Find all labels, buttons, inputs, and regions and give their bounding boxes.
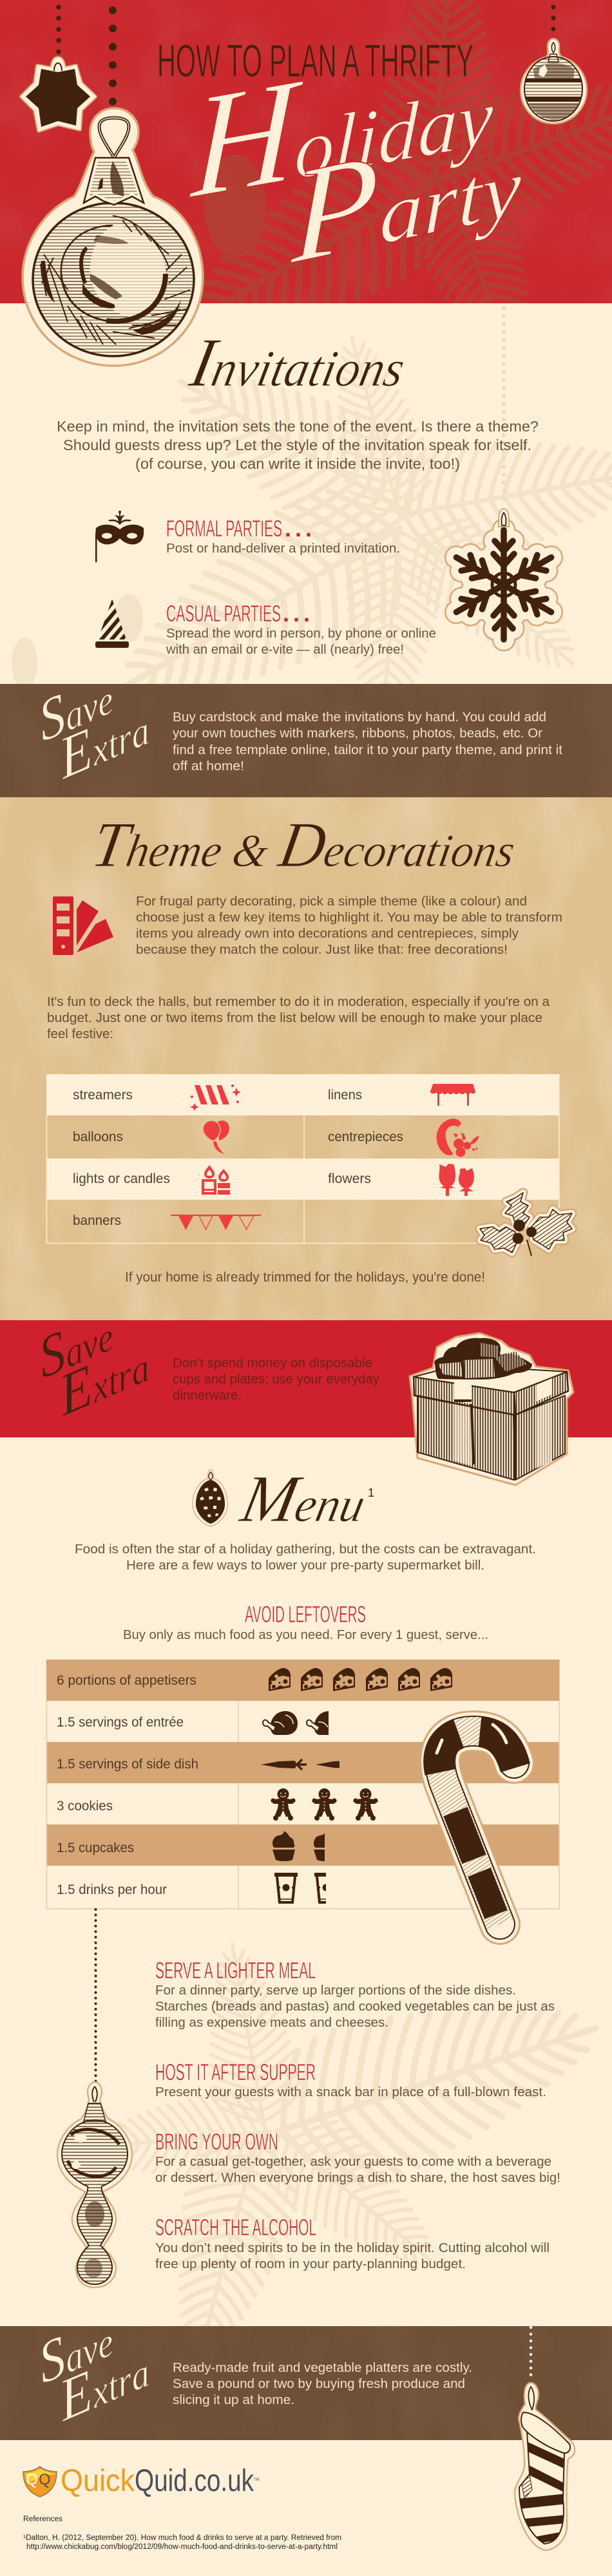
theme moderation text: It's fun to deck the halls, but remember to do it in moderation, especially if you're on a <box>47 994 550 1009</box>
ornament: stocking <box>515 2383 575 2550</box>
save extra text 2: Don’t spend money on disposable <box>173 1356 372 1370</box>
logo: quickquid: Quick <box>61 2464 135 2498</box>
save extra text 1: off at home! <box>173 759 244 773</box>
hanging dots: star ornament <box>56 7 61 53</box>
tip: bring your own: or dessert. When everyone brings a dish to share, the host saves big! <box>155 2170 560 2185</box>
casual parties text <box>166 626 436 657</box>
icon: banners <box>171 1215 261 1230</box>
casual parties text: with an email or e-vite — all (nearly) free! <box>166 642 404 657</box>
theme intro text: choose just a few key items to highlight it. You may be able to transform <box>136 910 562 925</box>
logo: quickquid <box>23 2464 260 2498</box>
theme intro text: items you already own into decorations and centrepieces, simply <box>136 926 519 941</box>
serving labels: 1.5 cupcakes <box>57 1841 134 1855</box>
references heading: References <box>23 2515 62 2523</box>
save extra text 3: slicing it up at home. <box>173 2392 294 2407</box>
menu intro text: Here are a few ways to lower your pre-party supermarket bill. <box>126 1558 484 1573</box>
theme moderation text <box>47 994 550 1041</box>
decoration labels: streamers <box>73 1088 133 1103</box>
ornament: small bauble top right <box>521 39 587 124</box>
save extra text 1: your own touches with markers, ribbons, photos, beads, etc. Or <box>173 726 542 741</box>
tip: host it after supper: HOST IT AFTER SUPPER <box>155 2059 316 2085</box>
references text: http://www.chickabug.com/blog/2012/09/how-much-food-and-drinks-to-serve-at-a-party.html <box>26 2543 338 2551</box>
save extra text 3: Save a pound or two by buying fresh produce and <box>173 2376 465 2391</box>
formal parties heading: FORMAL PARTIES <box>166 515 282 542</box>
title: holiday: Holiday <box>187 12 497 230</box>
logo: quickquid: TM <box>254 2478 260 2482</box>
ornament: gift box <box>410 1333 573 1485</box>
tip: scratch the alcohol: SCRATCH THE ALCOHOL <box>155 2214 316 2240</box>
casual parties heading: CASUAL PARTIES <box>166 600 281 627</box>
serving table grid <box>46 1660 559 1909</box>
casual parties text: Spread the word in person, by phone or online <box>166 626 436 641</box>
theme closing text: If your home is already trimmed for the holidays, you're done! <box>125 1270 485 1285</box>
logo: quickquid: Quid.co.uk <box>135 2464 254 2498</box>
theme intro text: For frugal party decorating, pick a simple theme (like a colour) and <box>136 894 527 909</box>
save extra text 1: find a free template online, tailor it to your party theme, and print it <box>173 743 562 757</box>
icon: colour swatch fan <box>53 896 113 955</box>
save extra band 3 <box>0 2326 612 2440</box>
icons: gingerbread cookies <box>271 1788 378 1821</box>
icon: pine cone <box>193 1470 227 1526</box>
invitations intro text: Keep in mind, the invitation sets the tone of the event. Is there a theme? <box>57 418 539 435</box>
tip: scratch the alcohol: free up plenty of room in your party-planning budget. <box>155 2257 466 2271</box>
ornament: holly <box>480 1193 572 1256</box>
tip: host it after supper: Present your guests with a snack bar in place of a full-blown feast. <box>155 2085 546 2099</box>
references text <box>23 2534 341 2551</box>
menu intro text: Food is often the star of a holiday gathering, but the costs can be extravagant. <box>75 1542 536 1557</box>
theme intro text: because they match the colour. Just like that: free decorations! <box>136 942 508 957</box>
save extra text 2: cups and plates; use your everyday <box>173 1372 380 1387</box>
save extra band 2 <box>0 1320 612 1437</box>
save extra text 2: dinnerware. <box>173 1388 242 1403</box>
logo: quickquid: Q <box>26 2471 38 2488</box>
save extra lettering 1: Save <box>34 660 117 755</box>
icons: drinks <box>274 1873 338 1902</box>
ornament: snowflake <box>451 509 557 639</box>
heading: invitations: Invitations <box>184 324 413 401</box>
save extra lettering 2 <box>34 1297 153 1430</box>
hanging dots: large ornament <box>109 10 117 103</box>
tip: scratch the alcohol: You don’t need spirits to be in the holiday spirit. Cutting alcohol will <box>155 2240 550 2255</box>
save extra lettering 2: Save <box>34 1297 117 1392</box>
tip: bring your own <box>155 2128 560 2185</box>
decoration labels: flowers <box>328 1171 371 1186</box>
ornament: star <box>21 58 95 131</box>
ornament: triple bulb <box>57 2082 132 2287</box>
invitations intro text: (of course, you can write it inside the invite, too!) <box>135 455 460 472</box>
serving labels: 6 portions of appetisers <box>57 1673 196 1688</box>
save extra band 1 <box>0 684 612 797</box>
save extra lettering 1 <box>34 660 153 793</box>
decoration labels: banners <box>73 1213 121 1228</box>
decoration labels: linens <box>328 1088 362 1103</box>
decoration labels: balloons <box>73 1130 123 1144</box>
decoration table grid <box>46 1074 559 1243</box>
invitations intro text <box>57 418 539 472</box>
theme intro text <box>136 894 562 957</box>
decoration labels: lights or candles <box>73 1171 170 1186</box>
save extra text 1 <box>173 710 562 773</box>
tip: host it after supper <box>155 2059 546 2099</box>
icon: mask <box>95 511 144 562</box>
tip: serve a lighter meal: SERVE A LIGHTER MEAL <box>155 1957 316 1984</box>
header: red background <box>0 0 612 303</box>
icon: centrepiece cornucopia <box>437 1119 479 1157</box>
header: fir branch watermark <box>200 0 612 303</box>
tip: bring your own: BRING YOUR OWN <box>155 2128 278 2155</box>
icon: balloons <box>203 1121 229 1154</box>
save extra lettering 2: Extra <box>54 1328 153 1430</box>
faint dotted hanging line <box>502 308 506 504</box>
theme and decorations background <box>0 797 612 1320</box>
tip: scratch the alcohol <box>155 2214 550 2271</box>
icons: cupcakes <box>273 1831 336 1861</box>
icons: carrots <box>261 1759 361 1770</box>
save extra lettering 3: Extra <box>54 2333 153 2435</box>
logo: quickquid: Q <box>39 2471 51 2488</box>
heading: theme and decorations: Theme & Decorations <box>87 809 522 880</box>
save extra lettering 3: Save <box>34 2302 117 2397</box>
dotted hanging line: stocking <box>530 2327 532 2382</box>
decoration labels <box>73 1088 403 1228</box>
invitations intro text: Should guests dress up? Let the style of the invitation speak for itself. <box>63 437 531 453</box>
serving labels: 1.5 servings of side dish <box>57 1757 198 1772</box>
title: party: Party <box>290 93 522 292</box>
save extra text 1: Buy cardstock and make the invitations by hand. You could add <box>173 710 546 724</box>
casual parties heading: ... <box>283 600 310 627</box>
save extra text 3 <box>173 2360 472 2407</box>
icons: six cheese wedges <box>269 1668 452 1691</box>
theme moderation text: feel festive: <box>47 1027 113 1041</box>
decoration labels: centrepieces <box>328 1130 403 1144</box>
invitations: fir branch watermark <box>12 336 612 684</box>
menu: fir branch watermark <box>118 1942 599 2326</box>
tip: serve a lighter meal: filling as expensive meats and cheeses. <box>155 2015 388 2030</box>
dotted hanging line <box>94 1909 97 2081</box>
reference mark: 1 <box>368 1486 374 1499</box>
avoid leftovers heading: AVOID LEFTOVERS <box>245 1601 366 1627</box>
icons: turkey legs <box>263 1711 341 1735</box>
serving labels <box>57 1673 198 1897</box>
ornament: large bauble <box>23 108 203 366</box>
save extra text 3: Ready-made fruit and vegetable platters are costly. <box>173 2360 472 2375</box>
ornament: candy cane <box>437 1725 515 1924</box>
save extra lettering 3 <box>34 2302 153 2435</box>
tip: bring your own: For a casual get-together, ask your guests to come with a beverage <box>155 2154 551 2169</box>
tip: serve a lighter meal: Starches (breads and pastas) and cooked vegetables can be just as <box>155 1999 555 2014</box>
save extra text 2 <box>173 1356 380 1403</box>
icon: flowers <box>439 1164 474 1196</box>
icon: candles <box>202 1165 230 1195</box>
theme moderation text: budget. Just one or two items from the list below will be enough to make your place <box>47 1010 542 1025</box>
references text: ¹Dalton, H. (2012, September 20). How much food & drinks to serve at a party. Retrieved from <box>23 2534 341 2542</box>
icon: party hat <box>95 600 129 648</box>
tip: serve a lighter meal <box>155 1957 555 2030</box>
serving labels: 1.5 servings of entrée <box>57 1715 184 1730</box>
serving labels: 3 cookies <box>57 1799 113 1814</box>
serving labels: 1.5 drinks per hour <box>57 1882 167 1897</box>
save extra lettering 1: Extra <box>54 691 153 793</box>
formal parties heading: ... <box>285 515 312 542</box>
menu intro text <box>75 1542 536 1573</box>
tip: serve a lighter meal: For a dinner party, serve up larger portions of the side dishes. <box>155 1983 516 1998</box>
formal parties text: Post or hand-deliver a printed invitation. <box>166 541 400 556</box>
icon: streamers <box>190 1084 241 1111</box>
icon: linens table <box>430 1084 475 1106</box>
hanging dots: right ornament <box>551 7 555 30</box>
avoid leftovers text: Buy only as much food as you need. For every 1 guest, serve... <box>123 1627 488 1642</box>
heading: menu: Menu <box>234 1461 374 1536</box>
